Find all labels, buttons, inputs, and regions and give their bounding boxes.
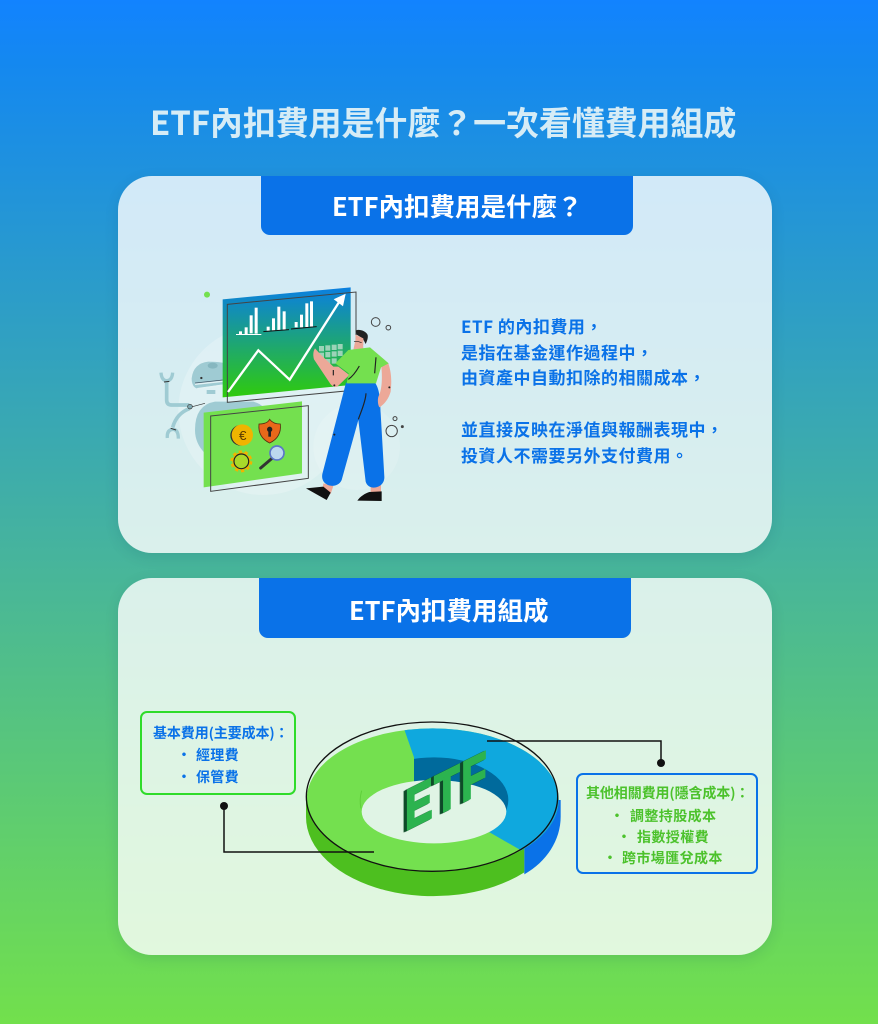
hole xyxy=(362,780,506,843)
decorative bubbles xyxy=(371,318,403,437)
callout: other fees: 其他相關費用(隱含成本)： xyxy=(586,783,749,803)
icon: euro coin: € xyxy=(239,428,247,443)
backdrop circle xyxy=(178,292,400,495)
robot xyxy=(161,362,267,453)
panel: what is the ETF expense xyxy=(118,176,772,553)
text block: definition: 並直接反映在淨值與報酬表現中， xyxy=(461,416,724,441)
panel: ETF expense composition xyxy=(118,578,772,955)
callout: other fees: 調整持股成本 xyxy=(630,806,716,826)
callout: basic fees: • xyxy=(177,745,191,765)
outline xyxy=(306,722,558,871)
icon: magnifier xyxy=(261,446,284,468)
icon: shield lock xyxy=(259,419,280,443)
text block: definition xyxy=(461,313,724,467)
callout: other fees: • xyxy=(610,806,624,826)
illustration: person presenting growth chart xyxy=(159,287,404,501)
leader line: other fees xyxy=(487,740,665,767)
text block: definition: 由資產中自動扣除的相關成本， xyxy=(461,364,706,389)
text block: definition: 投資人不需要另外支付費用。 xyxy=(461,442,688,467)
text block: definition: ETF 的內扣費用， xyxy=(461,313,603,338)
person xyxy=(306,330,391,501)
donut chart xyxy=(306,721,561,896)
heading: ETF expense composition xyxy=(259,578,631,638)
grid dots xyxy=(319,344,343,364)
callout: other fees: • xyxy=(603,848,617,868)
callout: other fees xyxy=(576,773,758,874)
heading: what is the ETF expense: ETF內扣費用是什麼？ xyxy=(332,187,583,224)
inner wall xyxy=(414,757,508,810)
callout: basic fees: 基本費用(主要成本)： xyxy=(153,723,288,743)
mini bar charts xyxy=(236,301,313,335)
text block: definition: 是指在基金運作過程中， xyxy=(461,339,654,364)
title: ETF內扣費用是什麼？一次看懂費用組成 xyxy=(150,97,736,145)
donut top: basic fees xyxy=(307,728,559,871)
callout: basic fees: • xyxy=(177,767,191,787)
chart screen xyxy=(223,287,356,402)
callout: basic fees: 經理費 xyxy=(196,745,239,765)
ETF lettering: ETF xyxy=(405,738,488,843)
icon: gear xyxy=(232,452,250,470)
callout: other fees: • xyxy=(617,827,631,847)
callout: other fees: 跨市場匯兌成本 xyxy=(622,848,723,868)
leader line: basic fees xyxy=(220,802,374,853)
donut side xyxy=(306,800,561,896)
heading: what is the ETF expense xyxy=(261,176,633,235)
growth arrow xyxy=(228,301,340,392)
callout: basic fees: 保管費 xyxy=(196,767,239,787)
donut top: other fees xyxy=(404,728,559,850)
callout: basic fees xyxy=(140,711,296,795)
heading: ETF expense composition: ETF內扣費用組成 xyxy=(349,591,549,628)
callout: other fees: 指數授權費 xyxy=(637,827,709,847)
green board with icons xyxy=(204,401,308,491)
